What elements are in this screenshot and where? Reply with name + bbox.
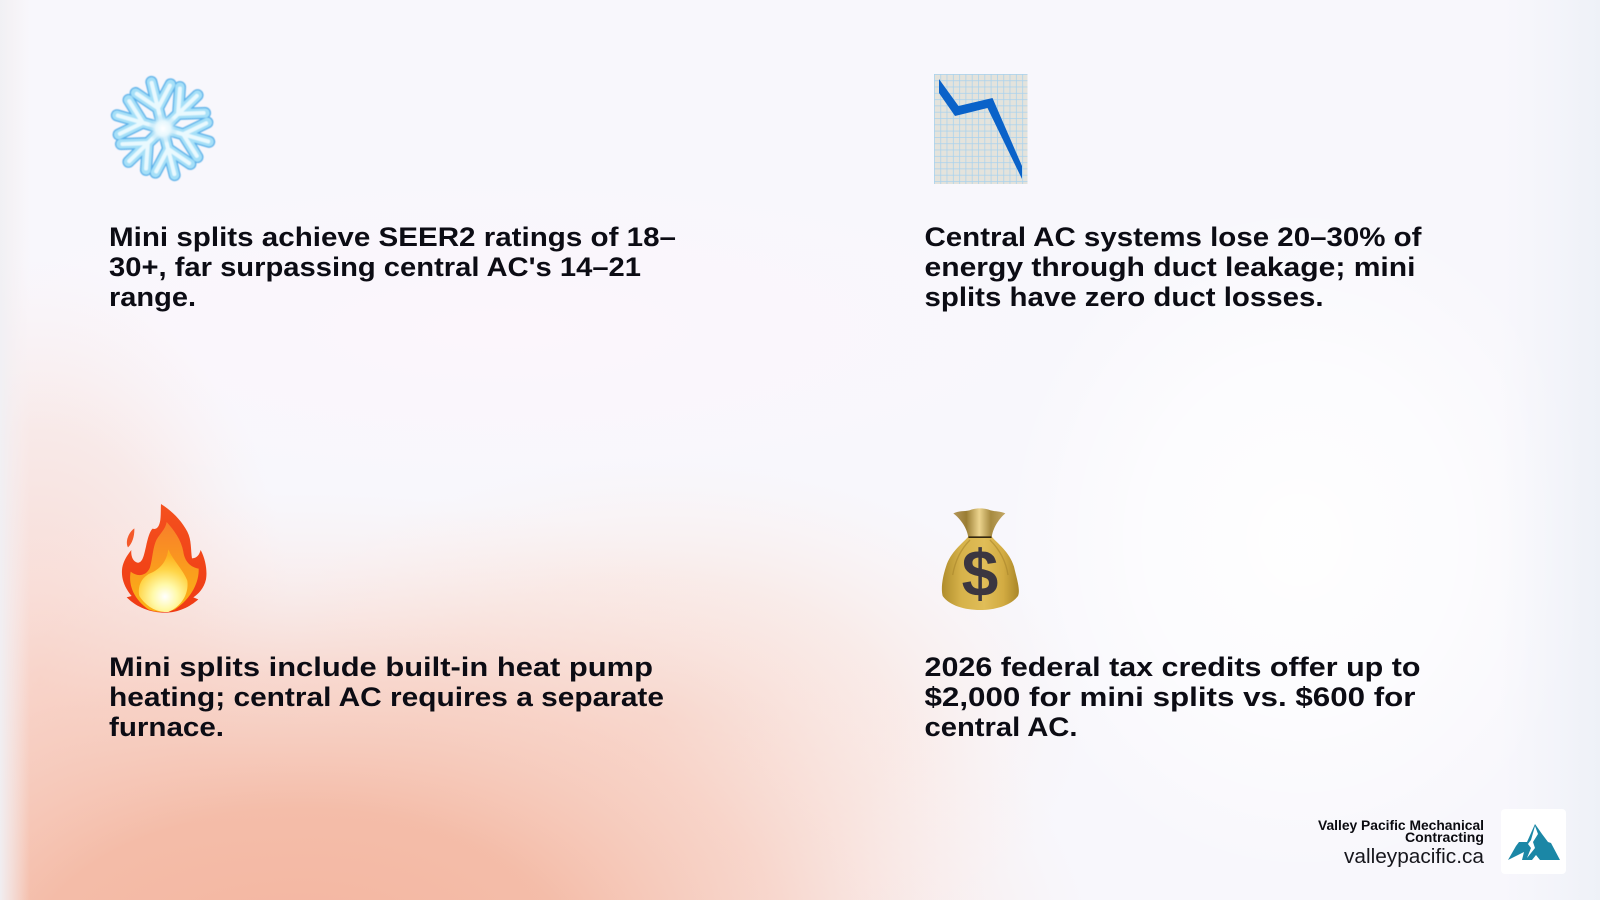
text: tax credits: $2,000 for mini splits vs. $600 for: [924, 682, 1416, 712]
text: heat pump: Mini splits include built-in heat pump: [109, 652, 653, 682]
brand footer: [1318, 809, 1566, 874]
card: heating: [109, 504, 664, 742]
icon: snowflake: [102, 70, 224, 187]
brand name: Valley Pacific Mechanical: [1318, 818, 1484, 833]
card: tax credits: [924, 508, 1420, 742]
text: duct leakage: Central AC systems lose 20–30% of: [924, 222, 1422, 252]
icon: falling chart: [934, 74, 1028, 184]
icon: money bag: [942, 508, 1019, 610]
icon: mountain: [1508, 824, 1560, 860]
text: duct leakage: [924, 222, 1422, 312]
text: duct leakage: splits have zero duct losses.: [924, 282, 1324, 312]
text: heat pump: heating; central AC requires a separate: [109, 682, 664, 712]
card: duct losses: [924, 74, 1422, 312]
icon label: dollar sign: $: [962, 536, 998, 610]
text: SEER2 ratings: range.: [109, 282, 196, 312]
card: efficiency: [102, 70, 676, 312]
text: duct leakage: energy through duct leakage; mini: [924, 252, 1416, 282]
text: SEER2 ratings: [109, 222, 676, 312]
text: SEER2 ratings: Mini splits achieve SEER2 ratings of 18–: [109, 222, 676, 252]
text: heat pump: furnace.: [109, 712, 224, 742]
logo tile: [1501, 809, 1566, 874]
brand name: Contracting: [1405, 830, 1484, 845]
text: tax credits: central AC.: [924, 712, 1078, 742]
brand name: [1318, 818, 1484, 845]
brand url: valleypacific.ca: [1344, 846, 1485, 868]
text: heat pump: [109, 652, 664, 742]
icon: fire: [122, 504, 206, 613]
text: SEER2 ratings: 30+, far surpassing central AC's 14–21: [109, 252, 641, 282]
text: tax credits: [924, 652, 1420, 742]
text: tax credits: 2026 federal tax credits offer up to: [924, 652, 1420, 682]
